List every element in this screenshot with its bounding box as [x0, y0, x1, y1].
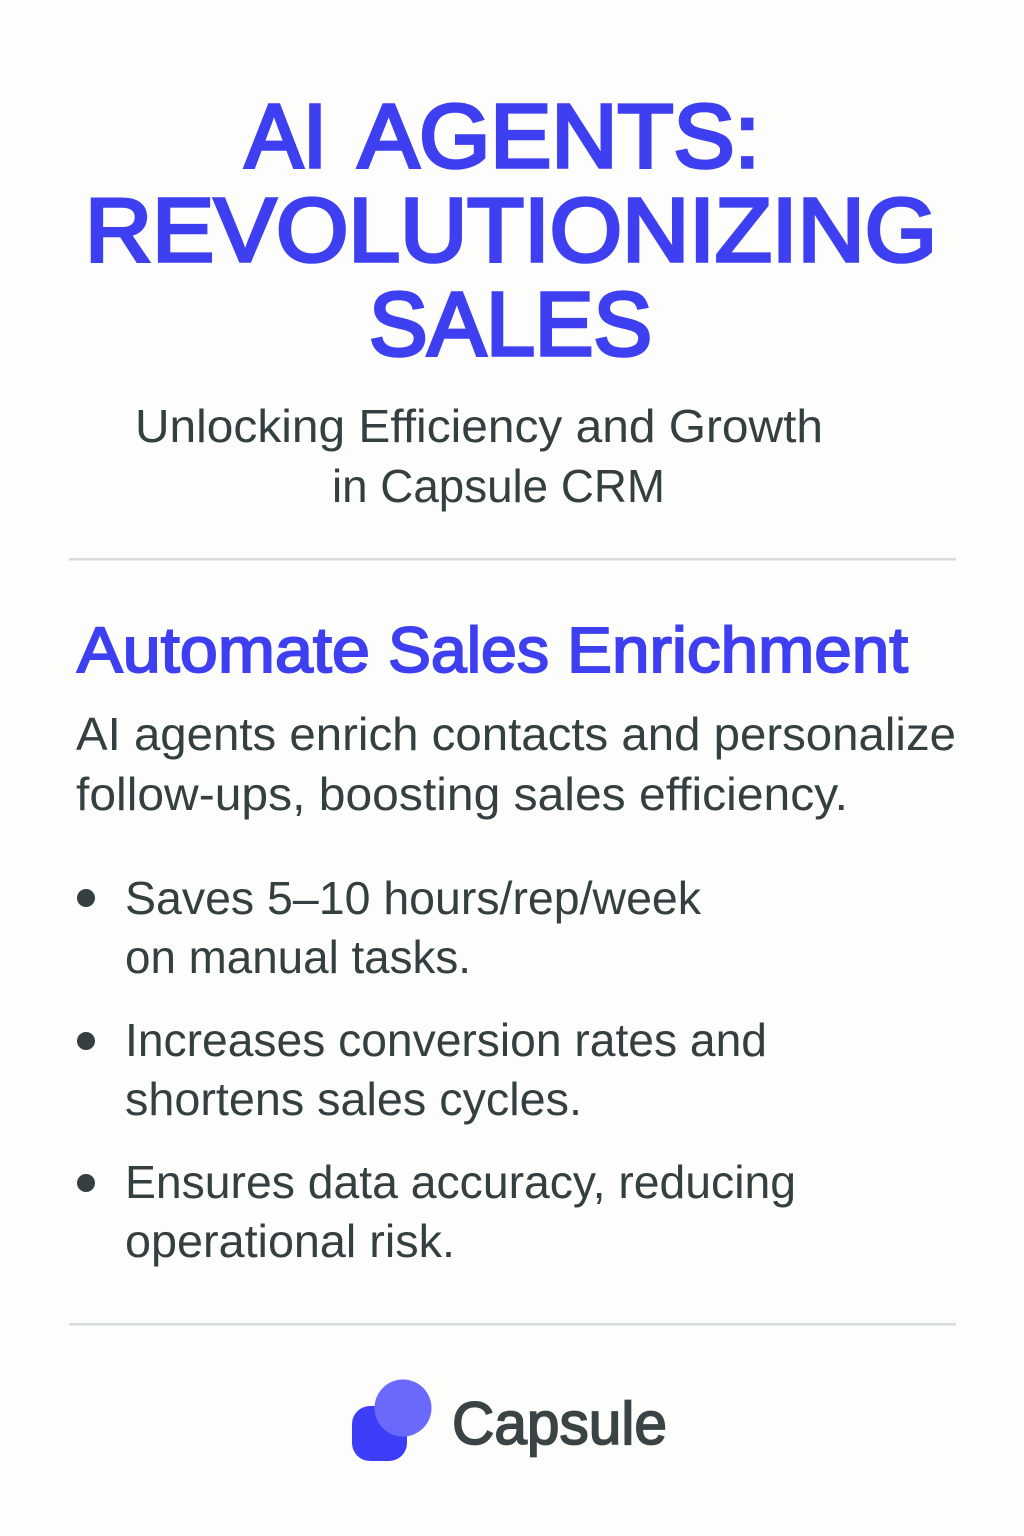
section heading — [77, 614, 908, 686]
bullet: conversion rates — [77, 1014, 767, 1125]
logo: Capsule — [352, 1380, 667, 1461]
title: REVOLUTIONIZING — [85, 181, 937, 281]
bullet list — [77, 872, 796, 1267]
icon: capsule mark — [352, 1380, 432, 1461]
bullet: data accuracy: operational risk. — [125, 1215, 455, 1267]
bullet: data accuracy — [77, 1156, 796, 1267]
intro text: follow-ups, boosting sales efficiency. — [76, 768, 848, 820]
title — [85, 87, 937, 375]
section heading: Enrichment — [567, 614, 908, 686]
section heading: Sales — [388, 614, 549, 686]
title: AI — [245, 87, 327, 187]
title: SALES — [369, 275, 652, 375]
subtitle — [135, 400, 823, 512]
section heading: Automate — [77, 614, 370, 686]
subtitle: Unlocking Efficiency and Growth — [135, 400, 823, 452]
subtitle: in Capsule CRM — [332, 460, 665, 512]
bullet: conversion rates: Increases conversion rates and — [125, 1014, 767, 1066]
intro text: AI agents enrich contacts and personalize — [76, 708, 956, 760]
wordmark: Capsule — [452, 1390, 667, 1457]
bullet: time saved: Saves 5–10 hours/rep/week — [125, 872, 702, 924]
title: AGENTS: — [358, 87, 760, 187]
bullet: conversion rates: shortens sales cycles. — [125, 1073, 582, 1125]
bullet: data accuracy: Ensures data accuracy, reducing — [125, 1156, 796, 1208]
bullet: time saved: on manual tasks. — [125, 931, 471, 983]
intro text — [76, 708, 956, 820]
bullet: time saved — [77, 872, 702, 983]
